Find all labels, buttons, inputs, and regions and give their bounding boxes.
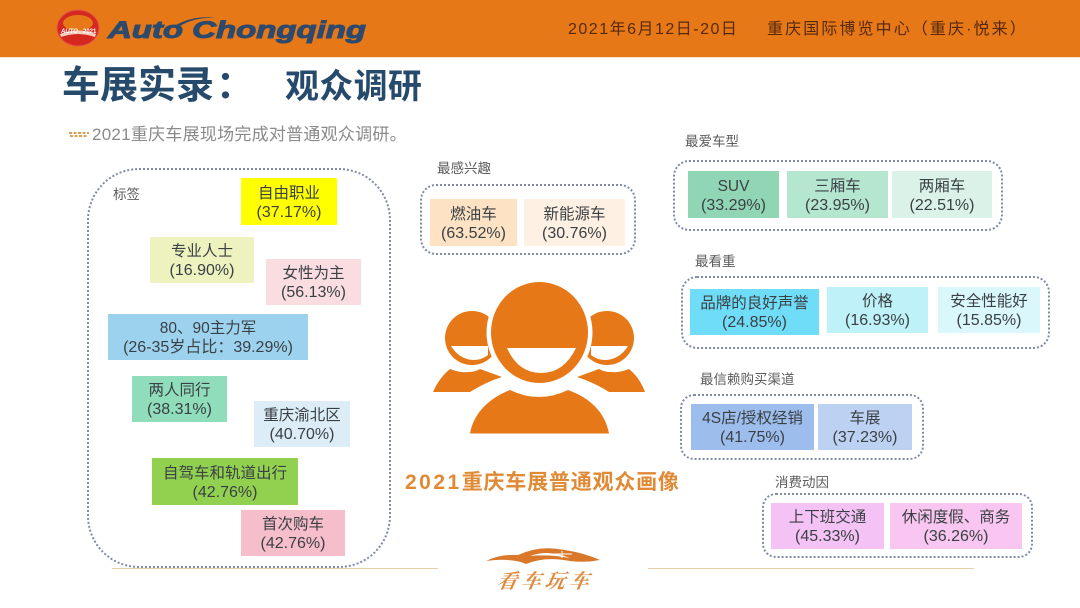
label: most valued: 最看重 [695,254,736,269]
footer line left [112,568,438,569]
tag: freelance: 自由职业 [258,184,320,202]
tag: freelance [241,178,337,225]
option: sedan: 三厢车 [814,178,861,194]
tag: travelling in pairs [132,376,227,422]
tag: post-80s and 90s: 80、90主力军 [160,320,256,337]
icon: Auto Chongqing logo [56,10,366,46]
option: hatchback: (22.51%) [910,196,974,214]
option: brand reputation [690,289,819,335]
icon: footer car logo [486,548,600,564]
option: commuting: 上下班交通 [789,509,866,526]
icon: Auto Chongqing logo: Auto Chongqing [107,17,366,44]
option: sedan: (23.95%) [805,196,870,214]
label: purchase motive: 消费动因 [775,475,829,490]
footer slogan: 看车玩车 [495,571,595,593]
label: most interested: 最感兴趣 [437,161,491,176]
option: fuel car: (63.52%) [441,224,506,242]
tag: driving and rail [152,458,298,505]
option: sedan [787,171,888,218]
option: safety: 安全性能好 [950,293,1028,310]
tag: Yubei district: (40.70%) [270,426,334,443]
header banner [0,0,1080,58]
option: price: (16.93%) [845,312,910,329]
tag: first car purchase [241,510,345,556]
event date: 2021年6月12日-20日 [568,21,738,38]
tag: driving and rail: (42.76%) [193,484,257,500]
icon: small show emblem [69,132,89,137]
panel: most valued [681,276,1050,349]
option: auto show: (37.23%) [833,429,897,446]
option: leisure and business [890,503,1022,549]
title: 观众调研 [285,68,422,106]
tag: post-80s and 90s [108,314,308,360]
tag: travelling in pairs: (38.31%) [147,401,212,418]
tag: mostly female: (56.13%) [281,284,346,301]
option: leisure and business: (36.26%) [924,528,988,545]
label: tags: 标签 [113,187,140,202]
icon: Auto Chongqing logo: AUTO [60,29,78,35]
tag: mostly female [266,259,361,305]
tag: professionals: (16.90%) [170,262,234,279]
subtitle: 2021重庆车展现场完成对普通观众调研。 [92,125,407,144]
option: new energy car: (30.76%) [542,224,607,242]
label: most trusted channel: 最信赖购买渠道 [700,372,794,387]
footer line right [648,568,974,569]
option: SUV: (33.29%) [701,196,766,214]
event venue: 重庆国际博览中心（重庆·悦来） [767,21,1028,38]
panel: tags [87,168,391,568]
option: brand reputation: (24.85%) [722,314,787,331]
tag: Yubei district: 重庆渝北区 [263,407,341,424]
option: fuel car [430,199,517,246]
option: new energy car [524,199,625,246]
icon: audience group [433,282,645,434]
option: 4S store [691,404,814,450]
option: price [827,287,928,333]
option: SUV [688,171,779,218]
option: price: 价格 [862,293,893,310]
option: SUV: SUV [718,178,749,194]
panel: favourite car type [673,160,1003,231]
tag: professionals [150,237,254,283]
option: commuting [771,503,884,549]
tag: first car purchase: 首次购车 [262,516,324,533]
title: 车展实录： [62,65,254,107]
tag: mostly female: 女性为主 [282,265,344,282]
tag: Yubei district [254,401,350,447]
option: fuel car: 燃油车 [450,206,497,222]
option: safety [938,287,1040,333]
icon: right person [577,311,645,392]
tag: post-80s and 90s: (26-35岁占比：39.29%) [123,339,293,356]
option: leisure and business: 休闲度假、商务 [902,509,1010,526]
option: commuting: (45.33%) [795,528,860,545]
tag: freelance: (37.17%) [257,204,321,220]
panel: most interested [420,184,636,255]
tag: travelling in pairs: 两人同行 [148,382,210,399]
portrait heading: 2021重庆车展普通观众画像 [405,471,680,494]
label: favourite car type: 最爱车型 [685,134,739,149]
option: auto show [818,404,912,450]
option: hatchback [892,171,992,218]
panel: most trusted channel [680,394,924,460]
option: 4S store: 4S店/授权经销 [702,410,803,427]
tag: professionals: 专业人士 [171,243,233,260]
option: safety: (15.85%) [957,312,1021,329]
tag: driving and rail: 自驾车和轨道出行 [163,464,287,482]
icon: left person [433,311,502,392]
icon: centre person [470,276,609,434]
option: brand reputation: 品牌的良好声誉 [700,295,809,312]
tag: first car purchase: (42.76%) [261,535,325,552]
option: hatchback: 两厢车 [919,178,965,194]
title [62,65,422,107]
option: 4S store: (41.75%) [720,429,785,446]
option: auto show: 车展 [849,410,880,427]
panel: purchase motive [762,493,1033,558]
icon: Auto Chongqing logo: 2021 [83,29,97,35]
option: new energy car: 新能源车 [543,206,606,222]
